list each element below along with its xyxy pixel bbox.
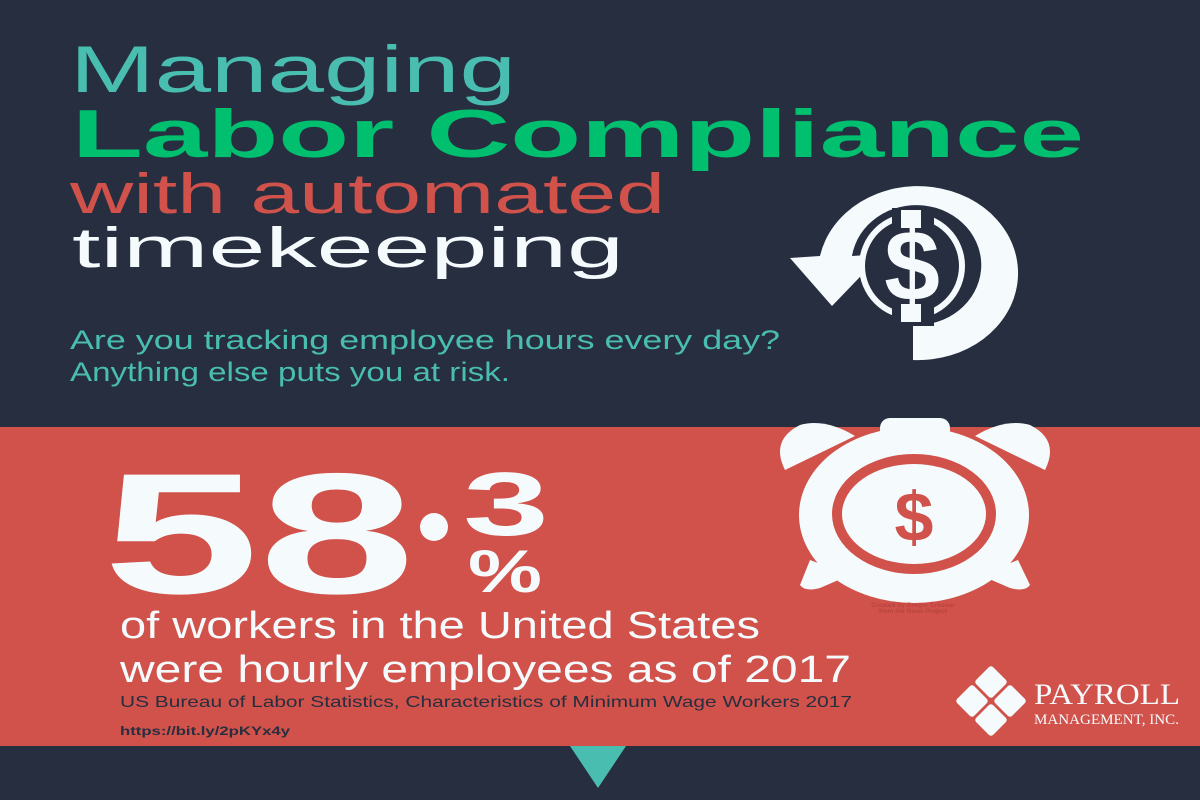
logo: Payroll Management bbox=[955, 665, 1180, 737]
subtitle bbox=[70, 325, 780, 387]
stat description: of workers in the United States bbox=[120, 605, 760, 647]
icon credit bbox=[871, 602, 955, 615]
source citation: US Bureau of Labor Statistics, Characteristics of Minimum Wage Workers 2017 bbox=[120, 694, 852, 711]
title: Labor Compliance bbox=[72, 96, 1084, 172]
icon: circular arrow with dollar bbox=[790, 186, 1018, 360]
big number bbox=[103, 438, 549, 630]
source citation: https://bit.ly/2pKYx4y bbox=[120, 724, 290, 738]
subtitle: Anything else puts you at risk. bbox=[70, 357, 510, 387]
icon: circular arrow with dollar: $ bbox=[884, 210, 940, 322]
source citation bbox=[120, 694, 852, 738]
icon credit: from the Noun Project bbox=[879, 608, 948, 615]
title: timekeeping bbox=[72, 216, 624, 280]
logo: Payroll Management: PAYROLL bbox=[1034, 678, 1180, 711]
icon credit: Created by Gregor Cresnar bbox=[871, 602, 955, 609]
title: with automated bbox=[68, 162, 665, 226]
icon: alarm clock with dollar bbox=[780, 418, 1050, 603]
stat description bbox=[119, 605, 851, 691]
title bbox=[68, 32, 1084, 280]
icon: alarm clock with dollar: $ bbox=[895, 478, 933, 556]
logo: Payroll Management: MANAGEMENT, INC. bbox=[1034, 712, 1179, 728]
title: Managing bbox=[70, 32, 516, 106]
big number: % bbox=[468, 538, 542, 605]
big number: 3 bbox=[463, 455, 549, 555]
stat description: were hourly employees as of 2017 bbox=[119, 649, 851, 691]
arrow: down triangle bbox=[570, 746, 626, 788]
subtitle: Are you tracking employee hours every day? bbox=[70, 325, 780, 355]
big number: 58 bbox=[103, 438, 415, 630]
panel: statistic band bbox=[0, 418, 1200, 746]
